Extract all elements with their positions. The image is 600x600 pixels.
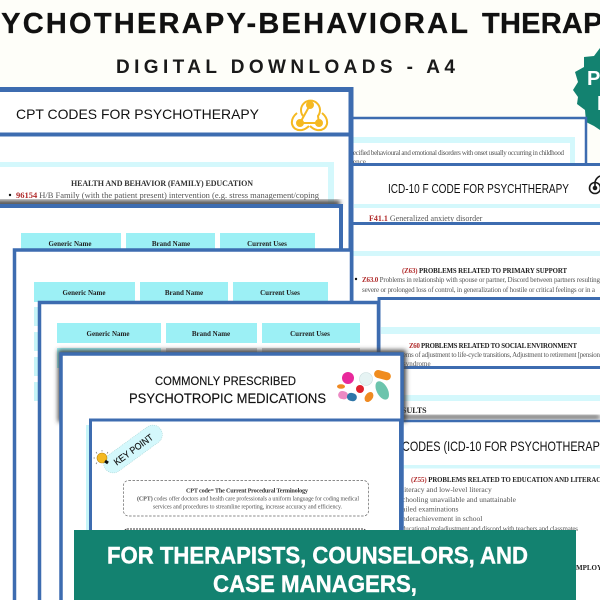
icon: webhook <box>292 101 327 130</box>
icon: light bulb <box>94 450 108 464</box>
page: commonly prescribed psychotropic medications <box>61 354 402 600</box>
page: Z63 problems related to primary support: severe or prolonged loss of control, in generalization of hostile or critical feelings or in a <box>362 286 596 294</box>
list: Z55 items: ailed examinations <box>402 504 459 514</box>
page: Z60 problems related to social environment: syndrome <box>403 360 431 368</box>
callout: CPT definition: CPT code= The Current Procedural Terminology <box>186 488 309 494</box>
heading: CPT codes: CPT CODES FOR PSYCHOTHERAPY <box>16 106 260 122</box>
page: medication table 3: Current Uses <box>290 330 330 338</box>
page: Z codes ICD-10 <box>395 421 600 600</box>
banner: FOR THERAPISTS, COUNSELORS, AND <box>107 542 528 570</box>
key point label: KEY POINT <box>112 432 156 468</box>
icon: stethoscope <box>590 176 600 194</box>
icon: pills <box>337 369 392 404</box>
page: CPT codes <box>0 90 351 300</box>
heading: health and behavior education: HEALTH AND BEHAVIOR (FAMILY) EDUCATION <box>71 179 253 188</box>
shadow below results page <box>400 415 600 419</box>
shadow above second page <box>0 200 340 208</box>
page: medication table 1 <box>0 206 341 600</box>
page: back behavioural disorders <box>352 118 586 168</box>
list: Z55 items: ducational maladjustment and discord with teachers and classmates <box>402 525 578 533</box>
shadow around medications page <box>58 350 406 422</box>
callout: CPT definition: services and procedures to streamline reporting, increase accuracy and efficiency. <box>153 504 342 510</box>
second callout <box>124 529 366 549</box>
page: key point <box>90 420 400 600</box>
heading: Z63: (Z63) PROBLEMS RELATED TO PRIMARY SUPPORT <box>402 268 567 275</box>
callout: CPT definition: (CPT) codes offer doctors and health care professionals a uniform language for coding medical <box>137 496 359 502</box>
page: Z63 problems related to primary support <box>351 224 600 304</box>
banner <box>74 530 576 600</box>
page: back behavioural disorders: ence <box>353 158 366 166</box>
page: medication table 1: Current Uses <box>247 240 287 248</box>
list: Z55 items: chooling unavailable and unattainable <box>402 495 517 504</box>
page: back behavioural disorders: ecified behavioural and emotional disorders with onset usually occurring in childhood <box>353 149 564 157</box>
page: ICD-10 F code <box>352 164 600 244</box>
page: medication table 1: Brand Name <box>152 240 190 248</box>
page: Z60 problems related to social environment <box>379 298 600 378</box>
page: medication table 3: Brand Name <box>192 330 230 338</box>
heading: psychotropic medications: PSYCHOTROPIC MEDICATIONS <box>129 391 326 406</box>
page: Z60 problems related to social environment: ems of adjustment to life-cycle transitions, Adjustment to retirement [pension <box>403 351 600 359</box>
page: medication table 2 <box>14 250 352 600</box>
callout: CPT definition <box>124 480 368 516</box>
list: Z55 items <box>402 485 578 533</box>
page: medication table 2: Brand Name <box>165 289 203 297</box>
page: Z63 problems related to primary support: Z63.0 Problems in relationship with spouse or partner, Discord between partners resulting <box>362 276 600 284</box>
heading: Z60: Z60 PROBLEMS RELATED TO SOCIAL ENVIRONMENT <box>409 343 577 350</box>
list: Z55 items: literacy and low-level literacy <box>402 485 492 494</box>
page: CPT codes: 96154 H/B Family (with the patient present) intervention (e.g. stress management/coping <box>16 190 320 200</box>
page: ICD-10 F code: F41.1 Generalized anxiety disorder <box>369 214 483 223</box>
page: medication table 2: Generic Name <box>63 289 105 297</box>
badge <box>573 48 600 132</box>
page: medication table 2: Current Uses <box>260 289 300 297</box>
heading: commonly prescribed: COMMONLY PRESCRIBED <box>155 376 296 388</box>
page: medication table 1: Generic Name <box>49 240 91 248</box>
list: Z55 items: nderachievement in school <box>402 514 482 523</box>
page: results <box>379 368 600 438</box>
subtitle: DIGITAL DOWNLOADS - A4 <box>116 57 455 78</box>
page: results: SULTS <box>402 406 427 415</box>
banner: CASE MANAGERS, <box>213 571 417 598</box>
key point label <box>100 421 166 477</box>
page: medication table 3: Generic Name <box>87 330 129 338</box>
page: medication table 3 <box>40 302 378 600</box>
